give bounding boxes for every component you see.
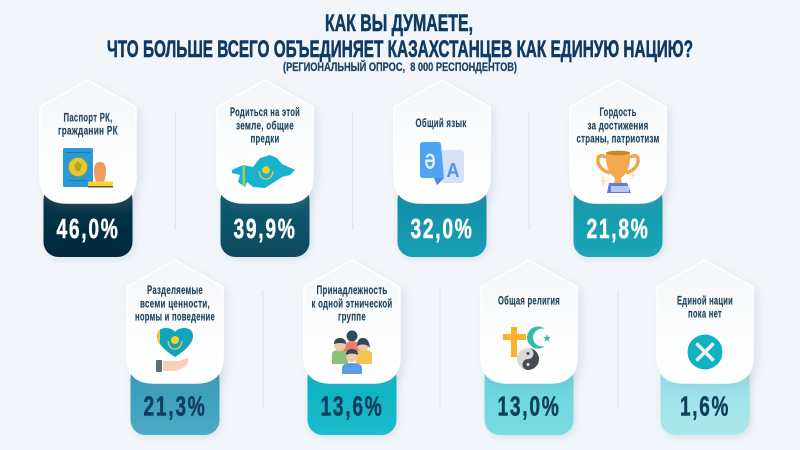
icon: language bubbles: А — [446, 160, 460, 182]
icon: passport and stamp — [63, 148, 113, 188]
label: Гордость — [600, 105, 636, 119]
value box: 32,0% — [410, 213, 474, 244]
value box: 13,6% — [320, 390, 384, 422]
label — [312, 283, 392, 324]
label — [230, 105, 300, 146]
icon: heart in hand — [156, 328, 193, 372]
label: за достижения — [587, 118, 649, 132]
shield panel — [40, 80, 136, 203]
label: предки — [250, 132, 280, 146]
label: нормы и поведение — [135, 310, 215, 324]
value box: 46,0% — [56, 213, 120, 244]
label: к одной этнической — [312, 296, 392, 310]
label: гражданин РК — [58, 124, 118, 138]
card: pride 21,8% — [570, 80, 666, 257]
label: земле, общие — [236, 118, 294, 132]
label: Общая религия — [498, 294, 560, 308]
label: Общий язык — [416, 116, 467, 130]
shield panel — [127, 260, 223, 383]
label: Принадлежность — [316, 283, 388, 297]
value box — [220, 185, 310, 257]
shield panel — [570, 80, 666, 203]
value box — [660, 363, 750, 435]
shield panel — [394, 80, 490, 203]
icon: map of Kazakhstan — [232, 155, 295, 188]
card: values 21,3% — [127, 260, 223, 435]
value box — [574, 185, 662, 257]
title block — [107, 10, 693, 74]
label: Единой нации — [677, 294, 733, 308]
card: no nation 1,6% — [657, 260, 753, 435]
icon: trophy — [598, 151, 638, 193]
shield panel — [217, 80, 313, 203]
icon: language bubbles — [420, 142, 464, 185]
icon: cross circle — [688, 334, 722, 370]
label: страны, патриотизм — [576, 132, 660, 146]
card: ethnic 13,6% — [304, 260, 400, 435]
card: language 32,0% — [394, 80, 490, 257]
value box — [398, 185, 486, 257]
value box — [308, 363, 396, 435]
icon: religious symbols — [503, 326, 551, 370]
shield panel — [481, 260, 577, 383]
card: passport 46,0% — [40, 80, 136, 257]
label — [576, 105, 660, 146]
card: land 39,9% — [217, 80, 313, 257]
value box: 1,6% — [680, 390, 730, 422]
label: Разделяемые — [147, 283, 203, 297]
title block: (РЕГИОНАЛЬНЫЙ ОПРОС, 8 000 РЕСПОНДЕНТОВ) — [283, 59, 517, 74]
card: religion 13,0% — [481, 260, 577, 435]
label — [58, 110, 118, 138]
shield panel — [657, 260, 753, 383]
icon: language bubbles: Ә — [424, 149, 436, 174]
label — [677, 294, 733, 320]
shield panel — [304, 260, 400, 383]
label: Паспорт РК, — [64, 110, 112, 124]
label: группе — [338, 310, 366, 324]
icon: group of people — [332, 330, 372, 374]
label: пока нет — [688, 306, 722, 320]
label — [135, 283, 215, 324]
value box: 21,8% — [586, 213, 650, 244]
value box — [130, 363, 220, 435]
value box: 21,3% — [144, 390, 206, 422]
label: всеми ценности, — [140, 296, 210, 310]
value box — [44, 185, 132, 257]
value box: 39,9% — [234, 213, 296, 244]
value box: 13,0% — [498, 390, 560, 422]
title block: КАК ВЫ ДУМАЕТЕ, — [325, 10, 473, 37]
label: Родиться на этой — [230, 105, 300, 119]
value box — [484, 363, 574, 435]
